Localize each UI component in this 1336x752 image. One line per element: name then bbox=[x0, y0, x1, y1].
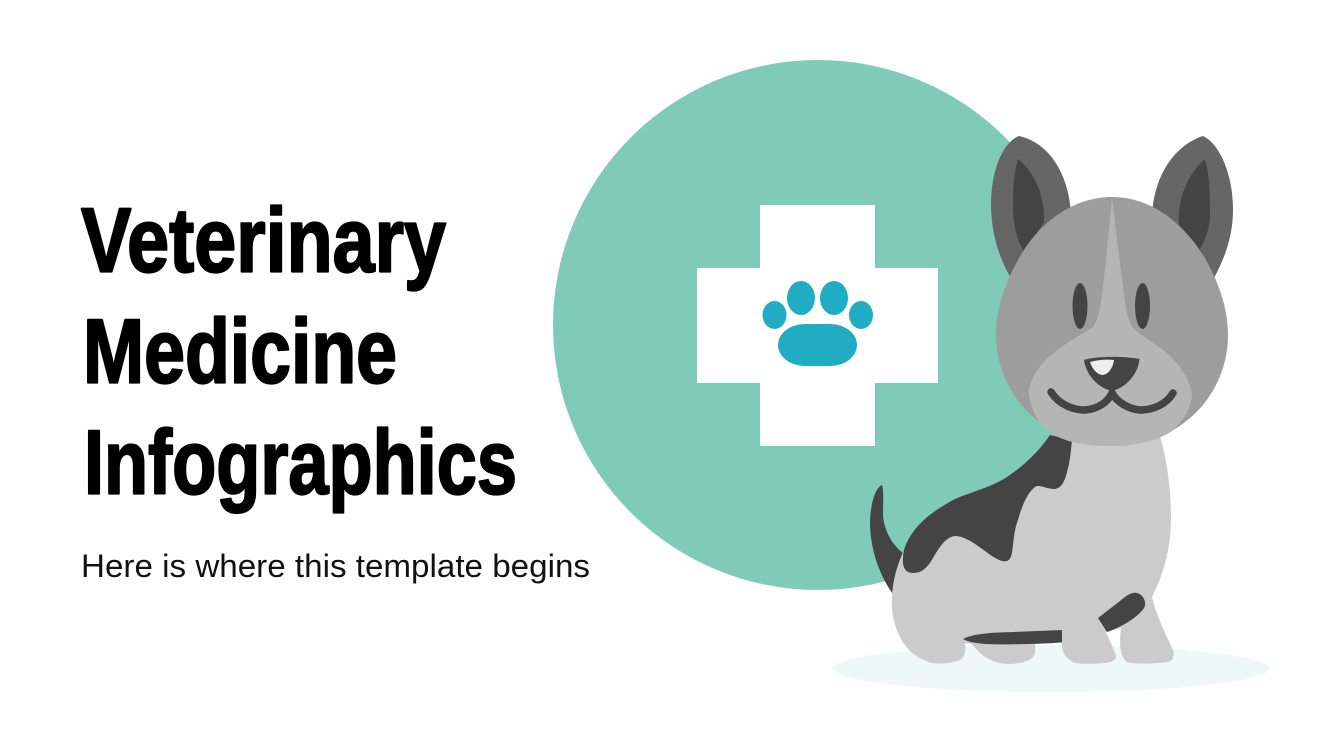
dog body bbox=[892, 436, 1174, 664]
title: Veterinary bbox=[81, 190, 446, 292]
dog head bbox=[996, 197, 1228, 446]
green circle bbox=[553, 60, 1083, 590]
dog tail bbox=[870, 485, 903, 593]
title: Infographics bbox=[84, 412, 517, 514]
dog leg stripe bbox=[1098, 593, 1145, 632]
left ear bbox=[991, 136, 1071, 280]
eyes bbox=[1072, 283, 1150, 329]
title bbox=[81, 190, 517, 514]
mouth bbox=[1051, 392, 1173, 410]
nose bbox=[1084, 357, 1140, 391]
icon: white medical cross with paw bbox=[697, 205, 938, 446]
title: Medicine bbox=[83, 302, 397, 402]
muzzle and blaze bbox=[1029, 198, 1192, 446]
illustration: dog bbox=[870, 136, 1233, 664]
ground shadow bbox=[833, 645, 1269, 692]
dog back patch bbox=[903, 435, 1072, 573]
icon: paw print bbox=[762, 281, 873, 366]
right ear bbox=[1152, 136, 1233, 278]
dog belly stripe bbox=[963, 630, 1062, 644]
subtitle: Here is where this template begins bbox=[81, 548, 590, 584]
white cross bbox=[697, 205, 938, 446]
